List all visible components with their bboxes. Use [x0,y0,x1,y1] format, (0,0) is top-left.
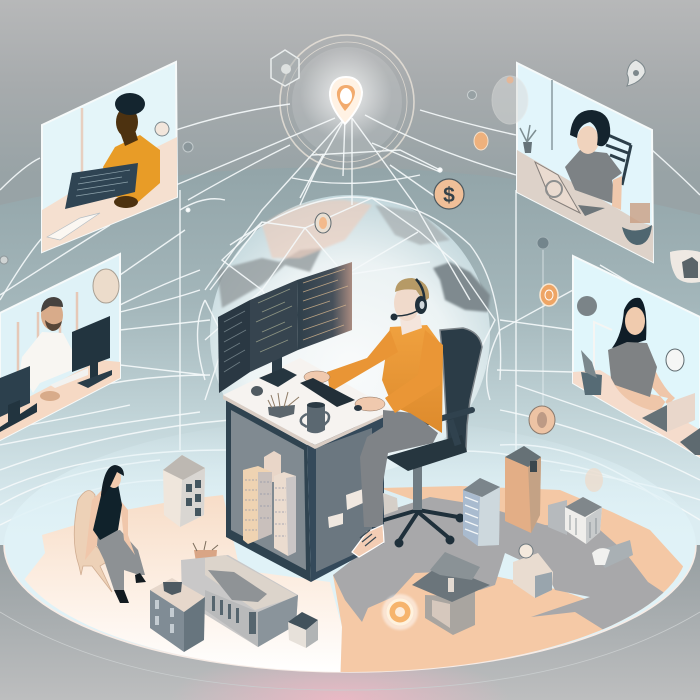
laptop [65,163,138,209]
headset [390,279,427,320]
wooden chair [74,491,112,592]
worker beard [45,320,62,331]
clock [93,269,119,303]
worker neck [120,130,138,146]
icon [577,296,597,316]
plant [268,392,299,418]
plant [520,125,536,153]
building: north-west [163,455,205,527]
map: pale land [24,495,342,672]
sticky notes [346,489,363,510]
monitor right [72,316,112,388]
near hand [355,397,385,411]
seated woman [74,465,146,603]
monitor left [218,300,250,393]
icon: small coin top [474,132,488,150]
monitor stand [272,352,282,378]
panel: top-left remote worker [42,62,177,252]
panel: top-right remote worker [517,63,653,262]
legs [92,530,145,590]
monitor right [297,262,352,350]
legs [360,410,438,527]
icon: dollar coin [434,179,464,209]
bowl [622,225,652,245]
keyboard [300,378,355,407]
worker hand [114,196,138,208]
far arm [327,330,398,392]
worker shirt [565,150,622,205]
monitor middle [250,280,298,372]
desk right face [307,416,384,582]
icon: left edge badge [0,256,8,264]
plant pot [581,350,602,395]
icon: location pin [300,49,392,141]
chair base [384,510,462,546]
chair arm [421,410,472,424]
worker hair [570,110,610,146]
desk left face [226,400,311,582]
back foot [383,493,398,515]
glowing rings around the pin [280,35,414,169]
chair seat [385,435,467,471]
monitor left [0,366,37,432]
pot on map [193,541,218,566]
right small building [513,544,553,598]
icon: dollar coin: $ [443,184,455,207]
pot on roof [163,582,182,595]
icon: small node right [468,90,476,100]
hair [101,465,124,497]
papers [47,213,100,240]
chair [606,135,631,185]
torso [93,484,122,540]
shoes [114,573,146,603]
icon: blurred orb [492,76,528,124]
worker body [103,135,160,203]
worker shirt [608,342,657,397]
laptop [642,393,695,432]
icon: mug [670,250,700,283]
arms [85,490,135,560]
glowing coin [382,594,418,630]
speech bubble [666,349,684,371]
pagoda house [412,552,490,635]
globe continents [217,200,490,312]
tall peach tower [505,446,541,533]
icon: peach coin [529,406,555,434]
chair column [413,463,422,510]
base ring [0,545,700,700]
small device [251,386,263,396]
network lines [0,104,700,525]
far hand [304,371,330,383]
worker arms [612,370,675,410]
worker hair [612,298,646,348]
icon: node [537,237,549,249]
floating icons [0,49,700,492]
small grey building [150,578,205,652]
worker face [577,126,599,154]
map land masses [24,486,683,672]
mouse [354,405,362,411]
map: peach land [333,572,631,672]
worker hair [115,93,145,115]
worker hand [40,391,60,401]
laptop [535,162,605,216]
chair [384,328,482,546]
icon: hexagon [271,50,299,86]
chair back [440,328,482,450]
panel: left remote worker [0,254,120,440]
blue tower [463,478,500,546]
worker face [116,107,138,137]
keyboard [50,368,88,388]
face [107,468,121,488]
white building [548,497,602,544]
dried plant [630,203,650,223]
map buildings [150,446,633,652]
worker hair [41,297,63,312]
worker arm [612,176,622,210]
icon: faded coin [585,468,603,492]
near arm [385,330,443,413]
shoe [352,525,384,557]
worker shirt [20,332,72,393]
globe [210,195,490,475]
building on desk [243,451,296,556]
neck [400,315,422,335]
icon: orange coin [540,284,558,306]
panel: right remote worker [573,256,700,457]
far right object [592,540,633,568]
tiny kiosk [288,612,318,648]
worker face [625,307,645,335]
main developer [304,278,443,557]
main desk [223,358,393,582]
mug [301,402,329,433]
face [394,285,420,321]
icon: small node left [183,142,193,152]
icon: coin on globe [315,213,331,233]
papers [680,428,700,455]
floor disk [4,418,696,672]
torso [382,325,443,433]
icon: speech bubble [627,60,645,86]
long civic building [181,555,298,647]
map: grey land [333,497,672,632]
hair [395,278,429,302]
map: peach land north [384,486,683,610]
worker head [41,300,63,330]
desk top [223,358,393,445]
desk items [218,262,362,433]
